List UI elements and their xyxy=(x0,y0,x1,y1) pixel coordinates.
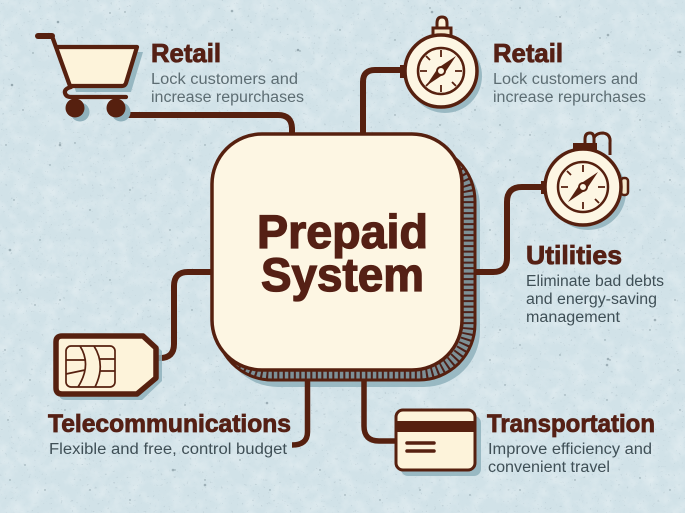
title: Prepaid xyxy=(257,205,428,258)
text: Retail left description: increase repurchases xyxy=(151,89,304,106)
heading: Retail right: Retail xyxy=(493,38,563,68)
heading: Retail left: Retail xyxy=(151,38,221,68)
text: Utilities description: Eliminate bad debts xyxy=(526,273,664,290)
central card shadow xyxy=(222,151,480,387)
icon: SIM chip contacts xyxy=(66,346,115,387)
text: Telecommunications description: Flexible and free, control budget xyxy=(49,441,288,458)
title: System xyxy=(261,248,424,301)
heading: Transportation: Transportation xyxy=(487,410,655,438)
text: Transportation description: Improve efficiency and xyxy=(488,441,652,458)
icon: compass top xyxy=(400,17,482,113)
text: Utilities description: management xyxy=(526,309,621,326)
icon: compass utilities xyxy=(541,133,628,230)
panel: central Prepaid System card xyxy=(212,134,475,380)
text: Utilities description: and energy-saving xyxy=(526,291,657,308)
text: Transportation description: convenient travel xyxy=(488,459,610,476)
connector lines xyxy=(128,70,545,445)
icon: transport card xyxy=(396,410,481,476)
icon: shopping cart xyxy=(38,36,143,122)
text: Retail left description: Lock customers and xyxy=(151,71,298,88)
text: Retail right description: Lock customers and xyxy=(493,71,638,88)
title xyxy=(257,205,428,301)
heading: Utilities: Utilities xyxy=(526,240,622,270)
icon: SIM card xyxy=(56,336,162,400)
heading: Telecommunications: Telecommunications xyxy=(48,410,291,438)
text: Retail right description: increase repurchases xyxy=(493,89,646,106)
